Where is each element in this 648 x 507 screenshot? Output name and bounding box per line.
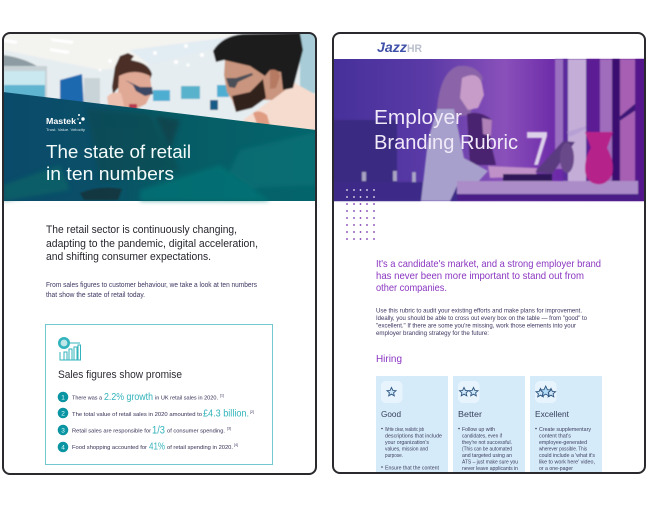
heading: Sales figures show promise [58,369,182,381]
laptop and lamp [503,174,552,181]
column: Better: and targeted using an [462,453,512,459]
title: Employer [374,107,462,129]
panel: employer branding cover [333,33,645,476]
title: in ten numbers [46,163,174,184]
statistic 1: [1] [220,394,224,398]
column: Good: Good [381,409,401,419]
icon: two stars [458,381,480,403]
section heading: Hiring: Hiring [376,353,402,365]
column: Better: (This can be automated [462,446,512,452]
logo: Mastek: Mastek [46,117,77,126]
dot grid [346,189,375,240]
supporting text [46,282,257,299]
statistic 2: £4.3 billion. [203,408,249,420]
intro text [46,224,258,263]
column: Good: values, mission and [385,446,428,452]
statistic 3: of consumer spending. [167,428,225,434]
supporting text: From sales figures to customer behaviour, we take a look at ten numbers [46,282,257,289]
column: Good [376,376,448,476]
statistic 1 [58,392,224,403]
hero photo: shoppers in store [3,33,316,201]
statistic 4: Food shopping accounted for [72,445,147,451]
hero photo: women at laptops [333,59,645,201]
statistic 1: 2.2% growth [104,392,153,403]
icon: magnifier over bar chart [58,337,81,360]
column: Good: Write clear, realistic job [385,427,424,433]
instructions text: Use this rubric to audit your existing efforts and make plans for improvement. [376,308,582,314]
logo: Mastek [46,114,85,132]
woman [112,53,152,94]
column: Better: they're not successful. [462,440,512,446]
intro text: adapting to the pandemic, digital acceleration, [46,238,258,250]
column: Good: descriptions that include [385,434,442,440]
intro heading: It's a candidate's market, and a strong employer brand [376,258,601,270]
statistic 4: 41% [149,442,165,452]
title: The state of retail [46,141,191,162]
statistic 1: There was a [72,396,103,402]
panel: retail report cover [3,33,316,474]
statistic 3: [3] [227,426,231,430]
column: Good: your organization's [385,440,430,446]
statistic 4: [4] [234,443,238,447]
column: Excellent: could include a 'what it's [539,453,596,459]
column: Better [453,376,525,476]
column: Better: Follow up with [462,427,495,433]
title [46,144,190,180]
logo: JazzHR: HR [407,43,422,55]
column: Excellent: wherever possible. This [539,446,587,452]
statistic 2: The total value of retail sales in 2020 amounted to [72,412,202,418]
desk [457,181,638,194]
instructions text [376,308,588,337]
vase [585,132,613,184]
instructions text: employer branding strategy for the future: [376,331,489,337]
man [242,82,315,130]
intro text: and shifting consumer expectations. [46,251,211,263]
supporting text: that show the state of retail today. [46,292,145,299]
column: Excellent [530,376,602,476]
statistic 1: in UK retail sales in 2020. [155,396,218,402]
statistic 4 [58,442,238,452]
intro heading: has never been more important to stand out from [376,270,584,282]
statistic 3: Retail sales are responsible for [72,428,151,434]
column: Excellent: Excellent [535,409,570,419]
column: Excellent: content that's [539,434,572,440]
icon: one star [381,381,402,403]
statistic 2: 2 [61,410,65,418]
statistic 2: [2] [250,410,254,414]
panel: sales figures [46,324,272,464]
instructions text: "excellent." If there are some you're missing, work those elements into your [376,324,576,330]
instructions text: Ideally, you should be able to cross out every box on the table — from "good" to [376,316,588,322]
logo: JazzHR [377,42,422,52]
column: Excellent: like to work here' video, [539,460,595,466]
title [374,107,518,154]
column: Better: Better [458,409,482,419]
statistic 3 [58,424,231,436]
statistic 2 [58,408,254,420]
seated woman [437,66,483,118]
title: Branding Rubric [374,132,518,154]
intro heading: other companies. [376,282,447,294]
logo: JazzHR: Jazz [377,39,407,55]
column: Good: purpose. [385,453,403,459]
column: Excellent: employee-generated [539,440,587,446]
statistic 4: 4 [61,444,65,452]
column: Better: never leave applicants in [462,466,518,472]
column: Excellent: Create supplementary [539,427,592,433]
column: Good: Ensure that the content [385,466,440,472]
teal diagonal overlay [3,92,316,201]
intro heading [376,258,601,294]
statistic 1: 1 [61,394,65,402]
intro text: The retail sector is continuously changing, [46,224,237,236]
icon: three stars [535,381,556,403]
column: Excellent: or a one-pager [539,466,573,472]
statistic 3: 1/3 [152,424,165,436]
statistic 3: 3 [61,428,65,434]
column: Better: ATS – just make sure you [462,460,518,466]
logo: Mastek: Trust. Value. Velocity [46,128,85,132]
column: Better: candidates, even if [462,434,503,440]
statistic 4: of retail spending in 2020. [167,445,233,451]
